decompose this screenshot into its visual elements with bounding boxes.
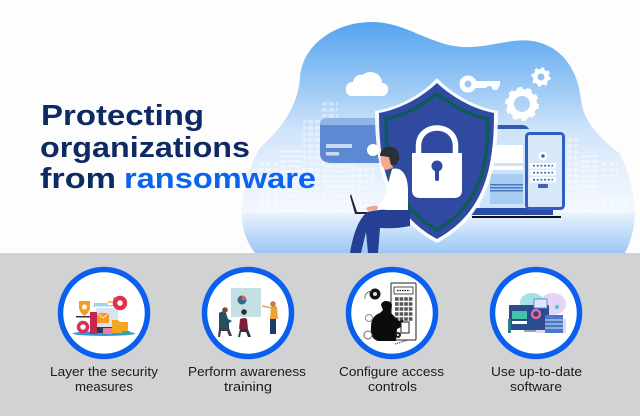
icon: laptop	[470, 125, 561, 218]
label	[491, 364, 582, 394]
label: Perform awareness	[188, 364, 307, 379]
icon: access keypad	[364, 283, 416, 344]
ground band	[242, 213, 635, 253]
icon: security layers	[73, 297, 135, 336]
label: measures	[75, 379, 134, 394]
item 2: perform awareness training	[188, 270, 307, 394]
label: Layer the security	[50, 364, 159, 379]
label: controls	[368, 379, 418, 394]
label	[188, 364, 307, 394]
icon: large gear	[507, 89, 537, 119]
item 3: configure access controls	[339, 270, 445, 394]
label	[50, 364, 159, 394]
title: from	[40, 163, 116, 195]
lower gray panel	[0, 253, 640, 416]
icon: shield with padlock	[375, 78, 498, 243]
label: Configure access	[339, 364, 445, 379]
label: software	[510, 379, 562, 394]
label: training	[224, 379, 272, 394]
illustration: blue blob background	[241, 22, 636, 214]
icon: credit card	[320, 118, 385, 163]
title	[40, 100, 316, 195]
label	[339, 364, 445, 394]
title: Protecting	[41, 100, 204, 132]
icon: training presentation	[218, 288, 278, 337]
icon: small gear	[532, 68, 550, 86]
title: organizations	[40, 132, 250, 164]
illustration: person with laptop	[350, 147, 410, 253]
item 4: use up-to-date software	[491, 270, 582, 394]
item 1: layer the security measures	[50, 270, 159, 394]
icon: key	[462, 78, 500, 90]
icon: phone login	[526, 134, 564, 208]
title: ransomware	[124, 163, 316, 195]
city skyline	[258, 100, 627, 213]
icon: software dashboard	[508, 293, 566, 333]
label: Use up-to-date	[491, 364, 582, 379]
icon: cloud	[346, 72, 388, 96]
